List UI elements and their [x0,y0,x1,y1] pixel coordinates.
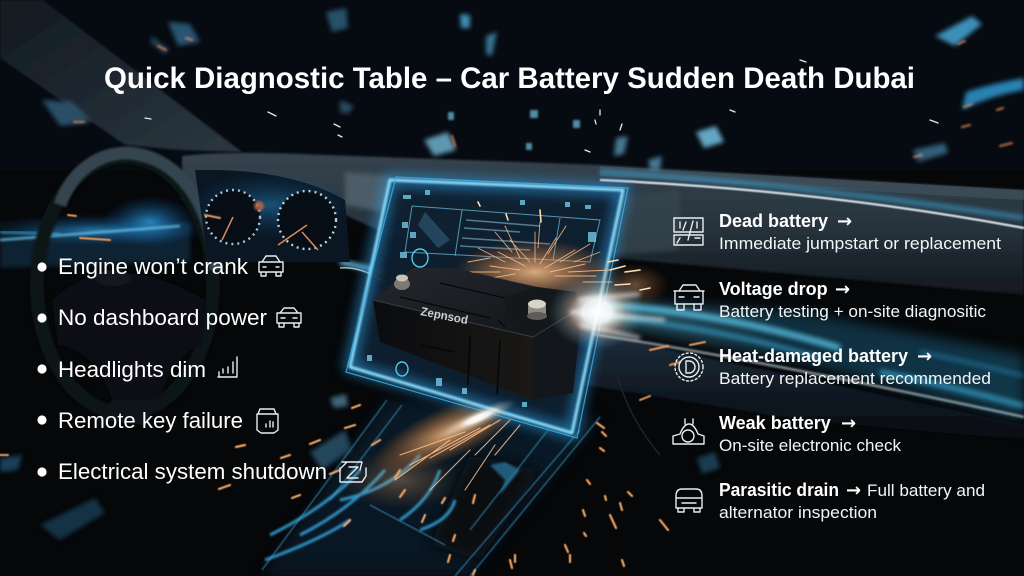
symptom: no dashboard power: No dashboard power [58,305,267,330]
instrument cluster gauges [185,170,355,262]
car battery [373,268,582,400]
action: voltage drop: Battery testing + on-site diagnositic [719,302,986,321]
action: heat-damaged battery: Battery replacement recommended [719,369,991,388]
action: weak battery: On-site electronic check [719,436,902,455]
action: dead battery: Immediate jumpstart or replacement [719,234,1001,253]
action: heat-damaged battery: → [917,346,932,367]
action: heat-damaged battery: Heat-damaged battery [719,346,908,366]
terminal: positive post [527,300,547,320]
action: voltage drop [674,279,986,321]
symptom: remote key failure: Remote key failure [58,408,243,433]
symptom: engine won't crank: Engine won’t crank [58,254,249,279]
action: weak battery: Weak battery [719,413,831,433]
action: parasitic drain: Parasitic drain [719,480,839,500]
title: Quick Diagnostic Table – Car Battery Sudden Death Dubai [104,62,915,95]
action: dead battery [674,211,1001,253]
action: weak battery [673,413,902,455]
impact flare [436,274,665,443]
holographic console tray [262,374,600,576]
light streaks across the dashboard [0,172,1024,420]
diagnosis and action list [673,211,1001,522]
action: parasitic drain: → [846,480,861,501]
terminal: negative post [394,274,410,290]
action: voltage drop: Voltage drop [719,279,828,299]
action: heat-damaged battery [675,346,991,388]
symptoms list [37,254,366,484]
action: parasitic drain: alternator inspection [719,503,877,522]
action: dead battery: Dead battery [719,211,828,231]
action: parasitic drain [676,480,985,522]
symptom: electrical system shutdown: Electrical system shutdown [58,459,327,484]
action: dead battery: → [837,211,852,232]
holographic diagnostic panel [346,177,670,438]
battery brand label: Zepnsod [419,304,469,327]
symptom: headlights dim: Headlights dim [58,357,206,382]
action: voltage drop: → [835,279,850,300]
action: weak battery: → [841,413,856,434]
steering wheel [37,153,216,425]
action: parasitic drain: Full battery and [867,481,985,500]
